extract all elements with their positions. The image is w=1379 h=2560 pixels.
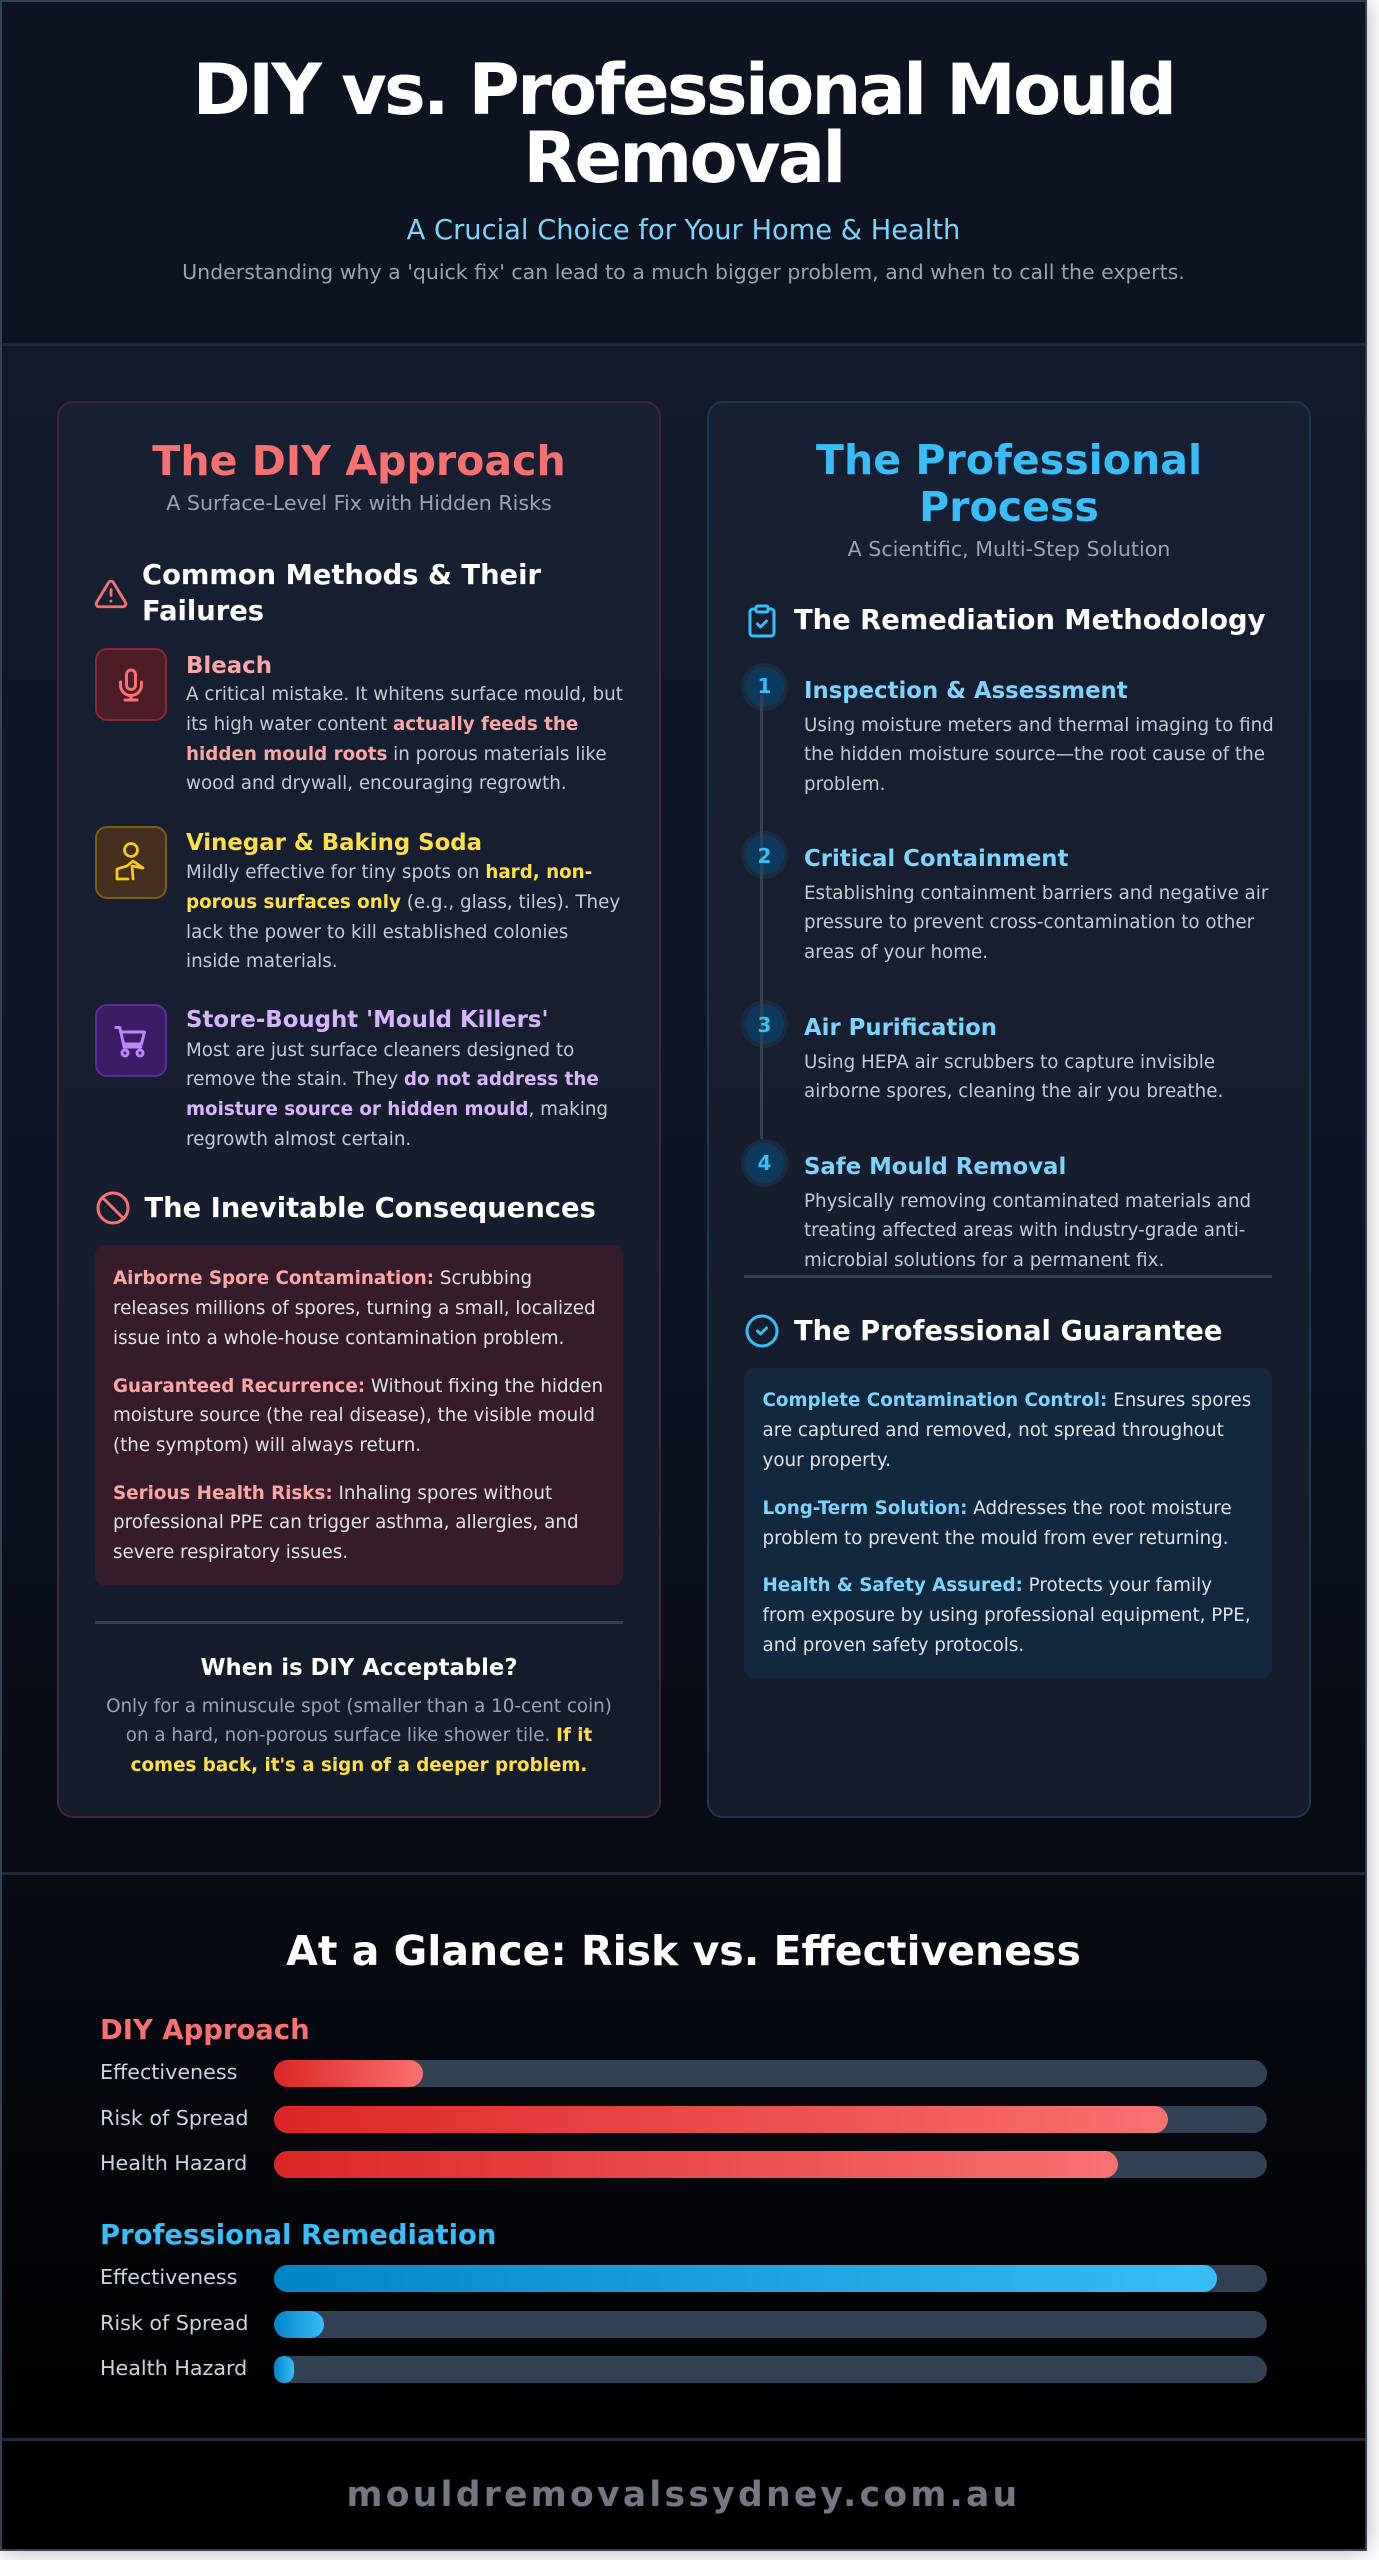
heading: The Professional Process: The Professional: [816, 436, 1202, 484]
step 1 marker: [741, 663, 788, 711]
step 2 text: [804, 882, 1268, 963]
heading: The DIY Approach: The DIY Approach: [152, 437, 566, 485]
step 1 number: 1: [758, 674, 771, 698]
consequence: recurrence: (the symptom) will always return.: [113, 1435, 421, 1456]
consequence: airborne spores: [113, 1268, 596, 1348]
subtitle: A Crucial Choice for Your Home & Health: [407, 215, 960, 246]
guarantee: contamination control: are captured and removed, not spread throughout: [762, 1420, 1224, 1441]
step 2 text: areas of your home.: [804, 942, 988, 963]
icon: prohibited: [96, 1192, 130, 1224]
guarantee: contamination control: your property.: [762, 1450, 891, 1470]
bar: effectiveness 95%: [100, 2265, 1267, 2292]
step 3 number: 3: [758, 1012, 771, 1036]
panel: professional process: [707, 401, 1311, 1818]
step 3 marker: [741, 1000, 788, 1048]
panel: DIY approach: [57, 401, 661, 1818]
callout: consequences: [95, 1245, 623, 1585]
footer website: mouldremovalssydney.com.au: [347, 2475, 1020, 2515]
method: bleach description: A critical mistake. It whitens surface mould, but: [186, 684, 623, 705]
heading: common methods: Common Methods & Their: [142, 560, 541, 590]
header section: [0, 0, 1367, 346]
step 3 text: [804, 1052, 1223, 1102]
step 2 text: pressure to prevent cross-contamination to other: [804, 912, 1254, 933]
method: vinegar description: [186, 862, 620, 972]
method: bleach description: hidden mould roots in porous materials like: [186, 744, 607, 764]
consequence: recurrence: [113, 1376, 603, 1456]
method: store-bought description: remove the stain. They do not address the: [186, 1069, 599, 1090]
title: Removal: [523, 116, 844, 198]
step 4 text: [804, 1190, 1251, 1271]
title: [193, 48, 1174, 198]
bar: health hazard 2%: [100, 2356, 1267, 2383]
icon: shopping cart: [95, 1004, 167, 1077]
consequence: airborne spores: releases millions of spores, turning a small, localized: [113, 1298, 596, 1319]
guarantee: long-term: problem to prevent the mould from ever returning.: [762, 1528, 1229, 1549]
method: vinegar title: Vinegar & Baking Soda: [186, 830, 482, 856]
step 4 text: treating affected areas with industry-grade anti-: [804, 1220, 1245, 1241]
step 1 text: [804, 714, 1274, 795]
text: when is DIY acceptable: on a hard, non-porous surface like shower tile. If it: [126, 1725, 592, 1746]
heading: common methods: [142, 560, 541, 627]
heading: methodology: The Remediation Methodology: [794, 605, 1265, 636]
title: DIY vs. Professional Mould: [193, 48, 1174, 130]
bar: risk of spread 90%: Risk of Spread: [100, 2106, 248, 2130]
chart heading: Professional Remediation: [100, 2220, 496, 2251]
chart heading: DIY Approach: [100, 2015, 310, 2046]
timeline: [741, 663, 1274, 1271]
consequence: recurrence: Guaranteed Recurrence: Without fixing the hidden: [113, 1376, 603, 1396]
step 3 text: airborne spores, cleaning the air you breathe.: [804, 1081, 1223, 1102]
bar: risk of spread 5%: [100, 2310, 1267, 2338]
consequence: health risks: Serious Health Risks: Inhaling spores without: [113, 1482, 552, 1504]
guarantee: contamination control: [762, 1390, 1251, 1470]
bar: risk of spread 5%: Risk of Spread: [100, 2310, 248, 2334]
method: vinegar description: porous surfaces only (e.g., glass, tiles). They: [186, 892, 620, 913]
consequence: airborne spores: issue into a whole-house contamination problem.: [113, 1328, 564, 1348]
guarantee: long-term: [762, 1498, 1232, 1549]
step 1 title: Inspection & Assessment: [804, 678, 1128, 704]
guarantee: health and safety: Health & Safety Assured: Protects your family: [762, 1575, 1212, 1596]
bar: health hazard 2%: Health Hazard: [100, 2356, 247, 2380]
heading: The Professional Process: [816, 436, 1202, 531]
heading: at a glance: At a Glance: Risk vs. Effectiveness: [286, 1927, 1081, 1975]
icon: vinegar figure: [95, 826, 167, 899]
main comparison section: [0, 346, 1367, 1875]
bar: health hazard 85%: [100, 2151, 1267, 2178]
bar: risk of spread 90%: [100, 2106, 1267, 2133]
guarantee: health and safety: and proven safety protocols.: [762, 1634, 1024, 1656]
subheading: A Scientific, Multi-Step Solution: [848, 537, 1170, 561]
bar: effectiveness 15%: [100, 2060, 1267, 2087]
text: when is DIY acceptable: Only for a minuscule spot (smaller than a 10-cent coin): [106, 1696, 612, 1716]
icon: bleach microphone: [95, 648, 167, 721]
step 4 title: Safe Mould Removal: [804, 1154, 1066, 1180]
method: store-bought description: moisture source or hidden mould, making: [186, 1099, 608, 1120]
step 2 text: Establishing containment barriers and negative air: [804, 882, 1268, 904]
consequence: recurrence: moisture source (the real disease), the visible mould: [113, 1405, 595, 1426]
method: vinegar description: inside materials.: [186, 951, 338, 972]
heading: guarantee: The Professional Guarantee: [794, 1316, 1222, 1347]
method: store-bought description: [186, 1040, 608, 1150]
method: bleach description: its high water content actually feeds the: [186, 714, 578, 735]
bar: effectiveness 15%: Effectiveness: [100, 2060, 237, 2084]
heading: common methods: Failures: [142, 596, 264, 627]
step 3 text: Using HEPA air scrubbers to capture invisible: [804, 1052, 1215, 1072]
callout: guarantee: [744, 1368, 1272, 1678]
step 3 title: Air Purification: [804, 1014, 997, 1040]
tagline: Understanding why a 'quick fix' can lead to a much bigger problem, and when to call the experts.: [182, 260, 1185, 284]
consequence: health risks: professional PPE can trigger asthma, allergies, and: [113, 1512, 579, 1533]
method: vinegar description: Mildly effective for tiny spots on hard, non-: [186, 862, 592, 883]
bar chart: professional remediation: [100, 2220, 1267, 2383]
step 2 title: Critical Containment: [804, 846, 1068, 872]
guarantee: health and safety: from exposure by using professional equipment, PPE,: [762, 1605, 1251, 1626]
text: when is DIY acceptable: comes back, it's a sign of a deeper problem.: [131, 1755, 587, 1776]
method: store-bought title: Store-Bought 'Mould Killers': [186, 1007, 549, 1033]
consequence: airborne spores: Airborne Spore Contamination: Scrubbing: [113, 1268, 532, 1289]
icon: check circle: [746, 1314, 778, 1348]
guarantee: health and safety: [762, 1575, 1251, 1656]
method: store-bought description: regrowth almost certain.: [186, 1129, 411, 1150]
step 2 number: 2: [758, 844, 771, 868]
heading: consequences: The Inevitable Consequences: [144, 1193, 596, 1224]
bar: health hazard 85%: Health Hazard: [100, 2151, 247, 2175]
step 4 text: microbial solutions for a permanent fix.: [804, 1250, 1164, 1271]
text: when is DIY acceptable: [106, 1696, 612, 1776]
method: bleach description: [186, 684, 623, 794]
method: vinegar description: lack the power to kill established colonies: [186, 922, 568, 942]
step 4 number: 4: [758, 1151, 771, 1175]
step 4 text: Physically removing contaminated materials and: [804, 1190, 1251, 1212]
bar chart: DIY approach: [100, 2015, 1267, 2178]
footer section: [0, 2441, 1367, 2548]
bar: effectiveness 95%: Effectiveness: [100, 2265, 237, 2289]
step 1 text: the hidden moisture source—the root cause of the: [804, 744, 1265, 765]
method: bleach description: wood and drywall, encouraging regrowth.: [186, 773, 567, 794]
consequence: health risks: [113, 1482, 579, 1563]
guarantee: contamination control: Complete Contamination Control: Ensures spores: [762, 1390, 1251, 1411]
icon: warning triangle: [94, 580, 128, 608]
method: store-bought description: Most are just surface cleaners designed to: [186, 1040, 574, 1060]
at a glance section: [0, 1875, 1367, 2441]
subheading: A Surface-Level Fix with Hidden Risks: [166, 491, 552, 515]
guarantee: long-term: Long-Term Solution: Addresses the root moisture: [762, 1498, 1232, 1519]
step 1 text: problem.: [804, 774, 885, 795]
method: bleach title: Bleach: [186, 652, 272, 678]
icon: clipboard check: [748, 604, 776, 638]
step 1 text: Using moisture meters and thermal imaging to find: [804, 714, 1274, 736]
heading: when is DIY acceptable: When is DIY Acceptable?: [200, 1654, 518, 1680]
consequence: health risks: severe respiratory issues.: [113, 1542, 348, 1563]
heading: The Professional Process: Process: [919, 483, 1099, 531]
step 4 marker: [741, 1139, 788, 1187]
step 2 marker: [741, 831, 788, 879]
